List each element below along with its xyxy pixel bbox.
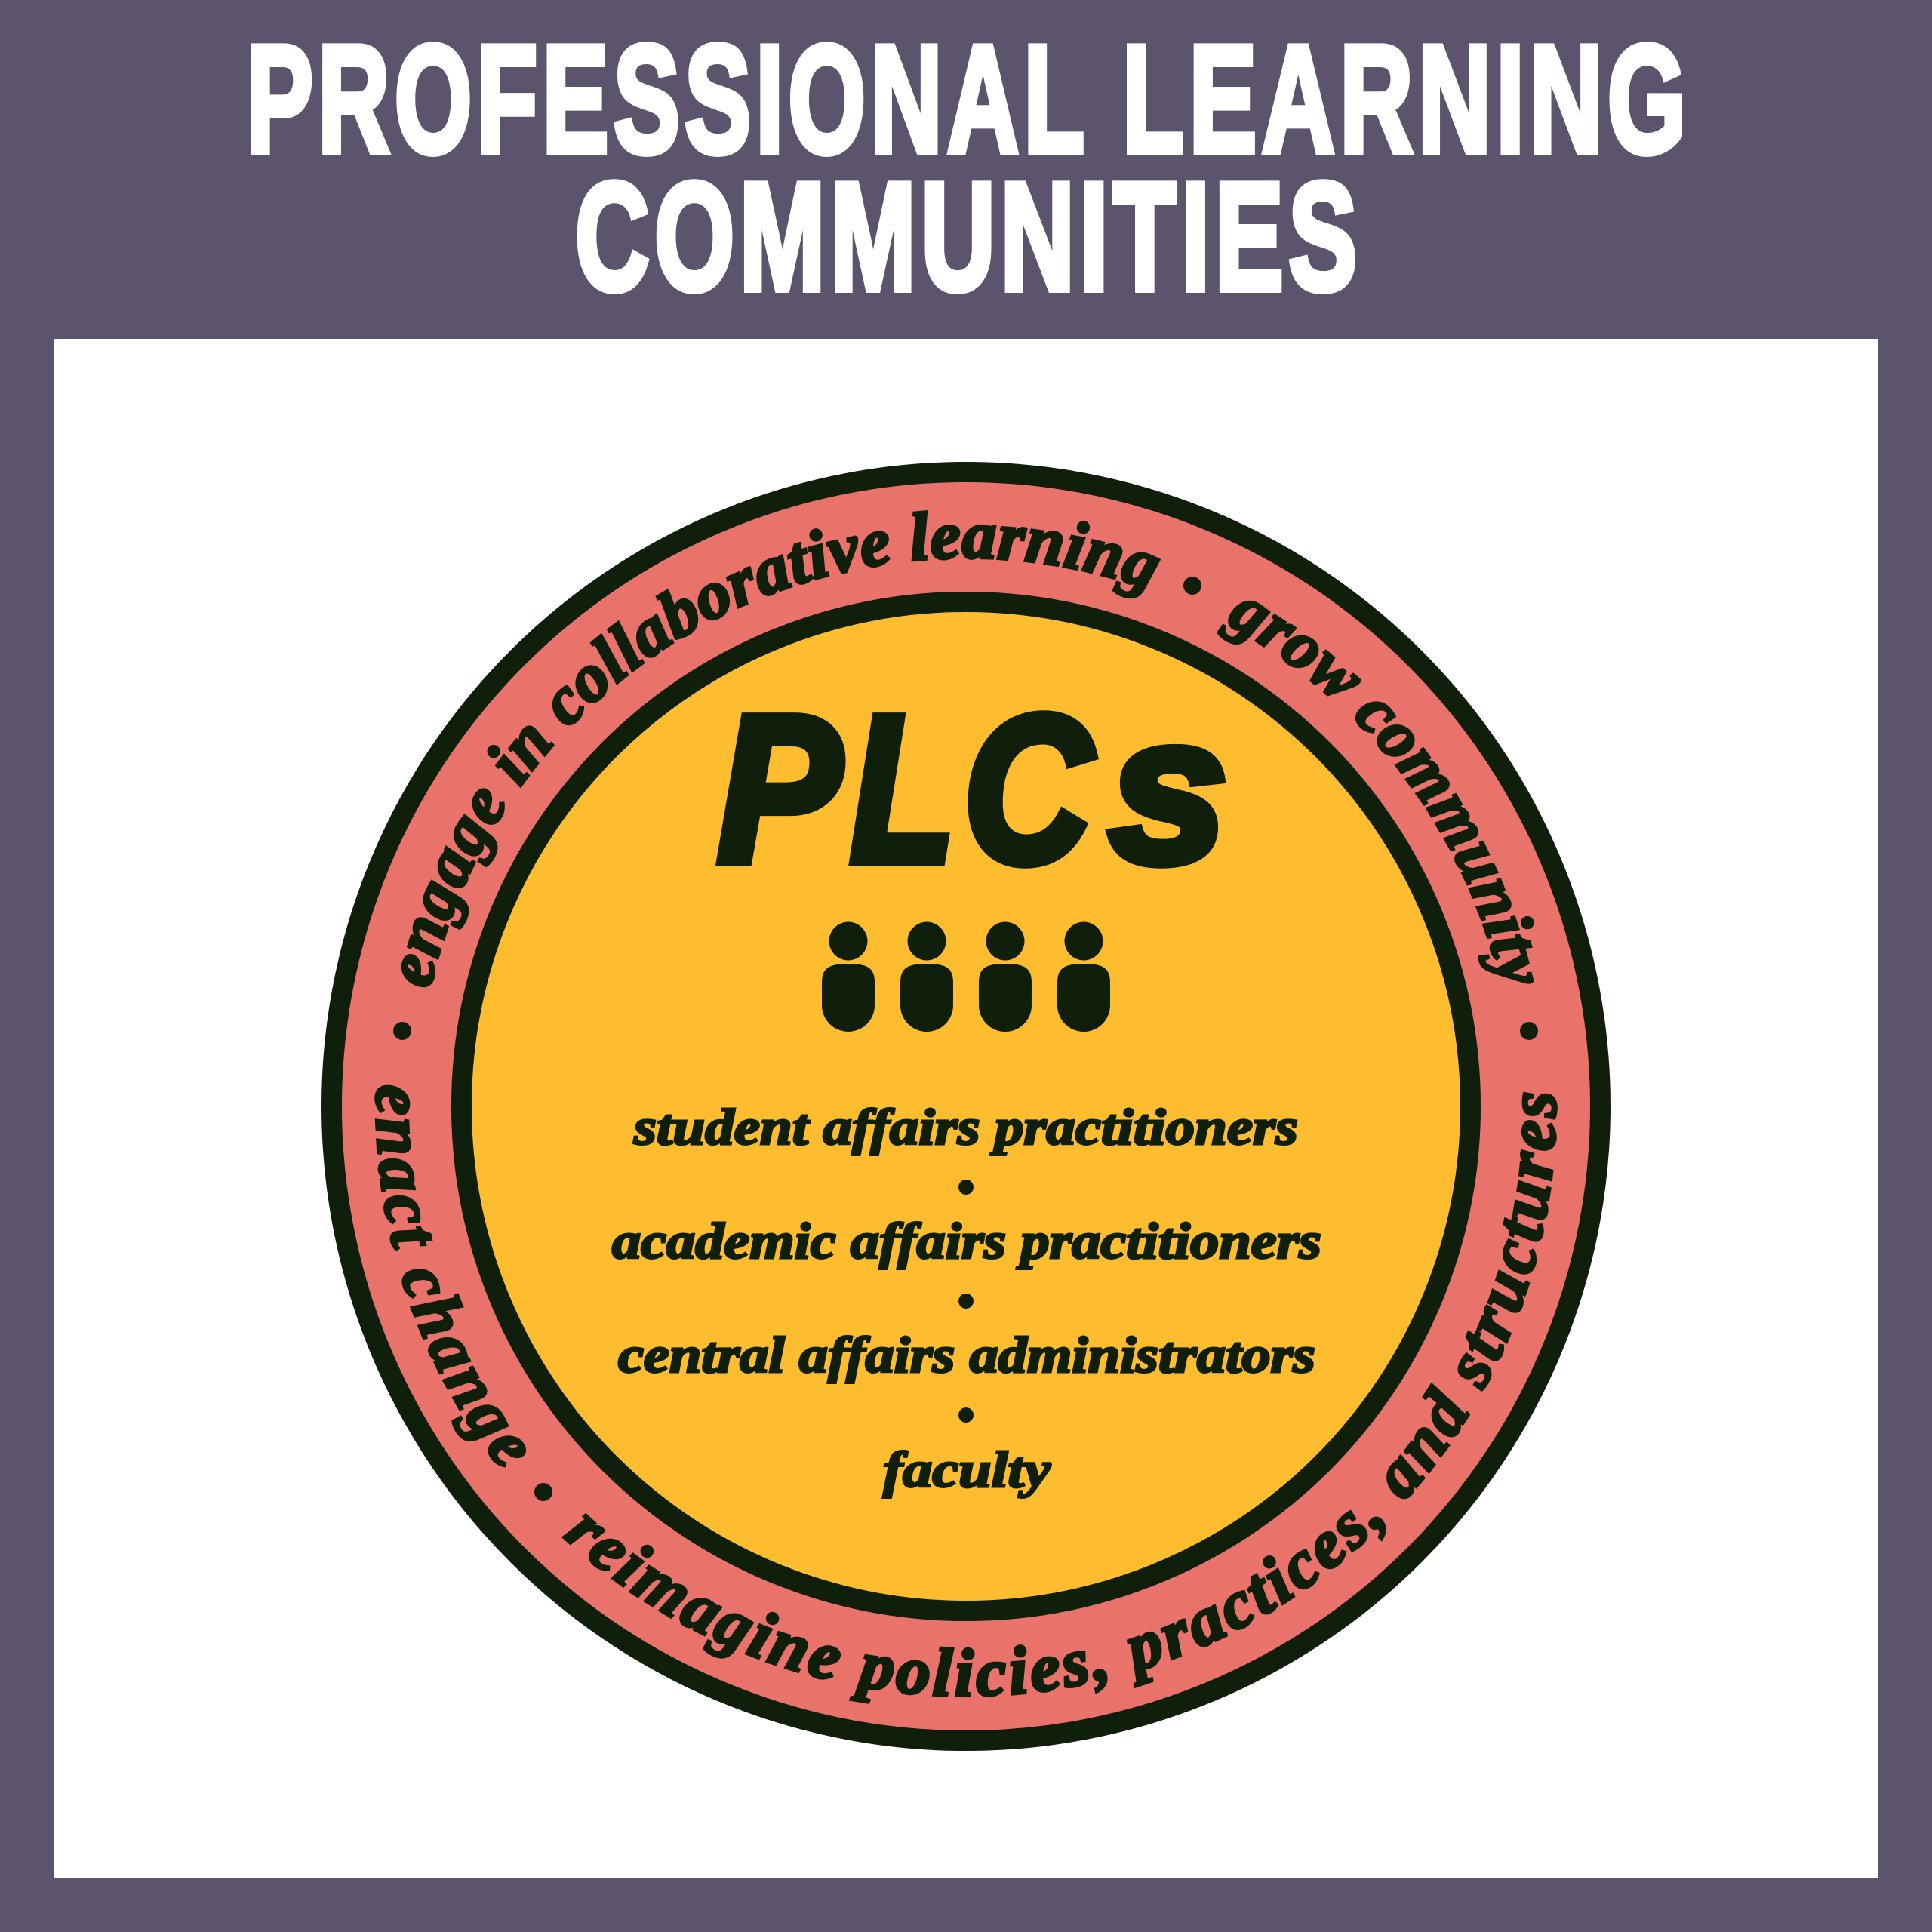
member list: academic affairs practitioners (612, 1212, 1321, 1269)
member list: central affairs administrators (618, 1326, 1315, 1383)
PLCs heading: C (964, 673, 1094, 906)
PLCs heading: s (1109, 673, 1227, 906)
ring separator dots (393, 577, 1538, 1501)
ring text: actions: reimagine policies, practices, and structures (561, 1091, 1558, 1704)
inner circle (462, 602, 1470, 1611)
member list: student affairs practitioners (633, 1098, 1298, 1155)
member list (612, 1098, 1321, 1498)
title (247, 14, 1691, 323)
white panel (54, 339, 1878, 1878)
title: PROFESSIONAL (247, 14, 1088, 186)
member list dots (958, 1180, 974, 1423)
ring text: actions: engage in collaborative learning (401, 510, 1161, 987)
PLCs heading: L (851, 673, 955, 906)
title: COMMUNITIES (575, 151, 1362, 323)
PLC circle diagram (321, 462, 1611, 1751)
outer ring (332, 472, 1600, 1740)
ring text: actions: grow community (1217, 601, 1534, 984)
ring text: actions: enact change (374, 1085, 527, 1468)
ring text: actions (374, 510, 1558, 1704)
member list: faculty (883, 1441, 1051, 1498)
PLCs heading: P (718, 673, 841, 906)
icon: four people (822, 922, 1110, 1032)
